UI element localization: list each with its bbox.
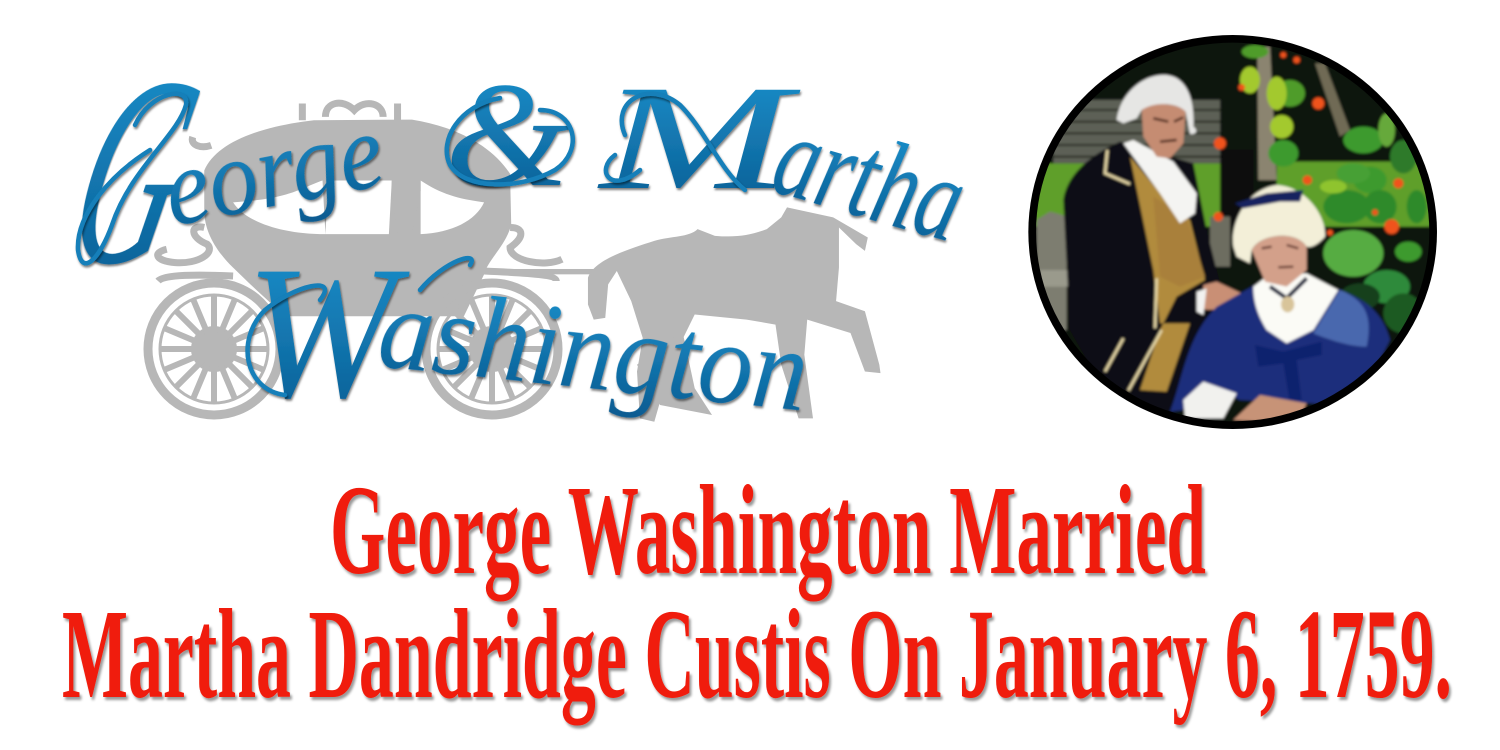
script title: Martha: M (597, 55, 801, 221)
fence (1037, 212, 1067, 330)
logo: carriage and names (47, 22, 980, 438)
headline (62, 459, 1452, 725)
tree trunks (1257, 47, 1277, 180)
Martha: hands (1233, 395, 1307, 423)
script title: George (47, 22, 393, 321)
horse (588, 207, 880, 422)
Martha: hair ribbon (1235, 190, 1303, 208)
flowers (1214, 52, 1403, 236)
Martha: sleeve cuff (1183, 382, 1237, 418)
George: coat trim (1105, 150, 1162, 391)
George: waistcoat (1130, 157, 1205, 392)
Martha: dress (1170, 285, 1390, 412)
script title: ampersand: & (445, 52, 570, 218)
George: wig (1117, 75, 1196, 134)
wheel: front (426, 283, 558, 415)
George: cravat (1123, 140, 1197, 223)
carriage silhouette (148, 103, 880, 422)
script title: Washington: ashington (373, 262, 815, 437)
script title: Martha (597, 55, 980, 267)
leaves (1240, 45, 1427, 333)
log wall (1053, 100, 1220, 163)
photo frame (1028, 35, 1437, 429)
script title: Washington: W (246, 228, 410, 438)
wheel: rear (148, 283, 280, 415)
Martha: wig and cap (1233, 185, 1325, 263)
script title: Washington (246, 228, 815, 438)
photo: George and Martha in costume (1020, 30, 1447, 437)
George: coat (1062, 141, 1219, 410)
script title: George: G (47, 22, 223, 321)
George: face (1142, 104, 1186, 158)
script title: Martha: artha (761, 87, 980, 267)
Martha: fichu (1253, 273, 1338, 343)
George: hand (1203, 282, 1242, 310)
Martha: face (1252, 236, 1307, 287)
Martha: bow (1255, 342, 1322, 403)
Martha: necklace (1270, 278, 1307, 298)
script title: George: eorge (154, 91, 393, 250)
lawn (1033, 162, 1430, 227)
